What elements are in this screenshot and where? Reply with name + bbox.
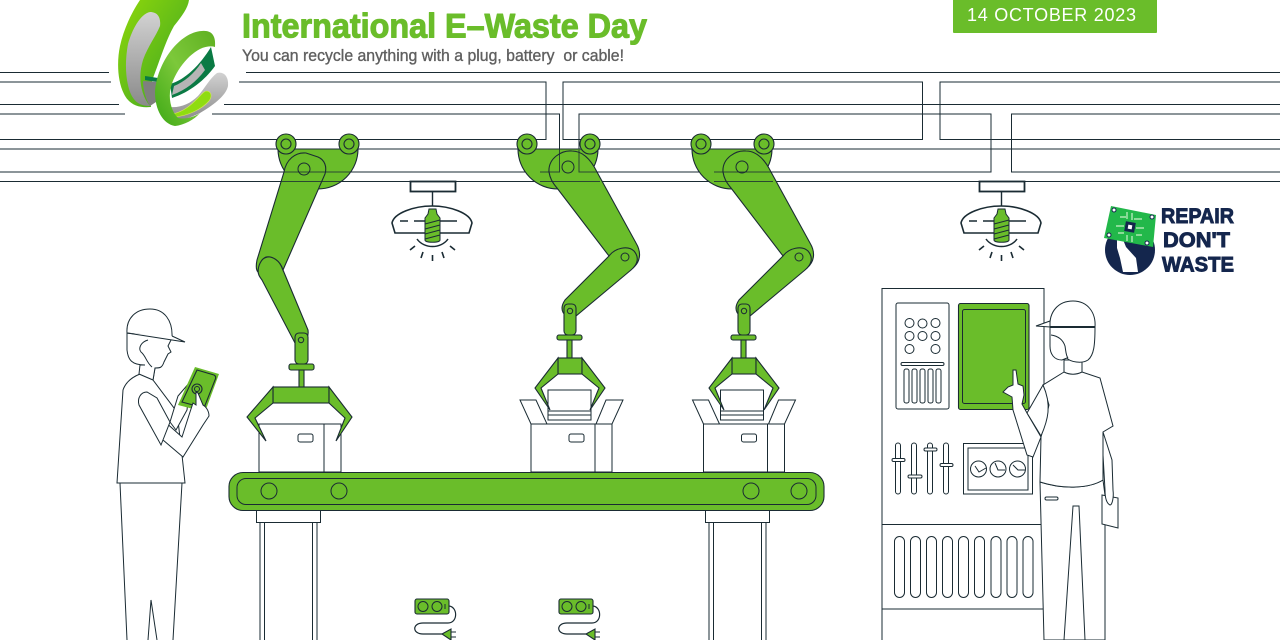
date badge: 14 OCTOBER 2023 [967,5,1136,25]
conveyor belt [229,472,824,510]
robot arm 3 [691,134,814,410]
robot arm 1 [247,134,359,441]
box 3 with item [692,390,796,472]
power strip 2 [559,599,600,640]
sliders [892,443,953,494]
worker with tablet [117,309,219,640]
inspection lamp 2 [961,182,1041,261]
control panel cabinet [882,288,1044,640]
title: International E–Waste Day [242,8,647,46]
box 1 [259,424,341,472]
date badge [953,0,1157,33]
box 2 with item [520,390,623,472]
gauges [964,444,1032,494]
repair don't waste badge: DON'T [1163,229,1230,252]
repair don't waste badge: WASTE [1162,254,1234,276]
repair don't waste badge [1104,205,1234,276]
worker at control panel [1003,301,1118,640]
subtitle: You can recycle anything with a plug, battery or cable! [242,46,624,65]
green touch screen [958,304,1029,410]
event logo swirl [118,0,228,126]
power strip 1 [415,599,456,640]
vent slots [894,536,1033,598]
conveyor stand left [256,510,320,640]
repair don't waste badge: REPAIR [1161,205,1234,228]
button and slot module [896,303,949,409]
robot arm 2 [517,134,640,410]
inspection lamp 1 [392,182,472,261]
conveyor stand right [706,510,770,640]
overhead pipe network [0,72,1280,182]
